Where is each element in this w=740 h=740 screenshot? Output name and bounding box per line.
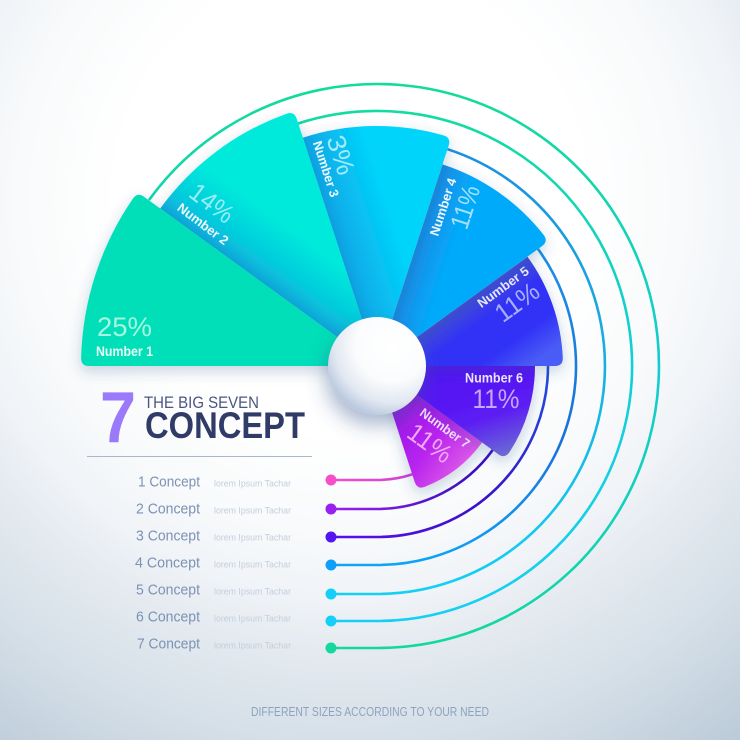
line 2: purple [331,450,493,509]
row 7: 7 Concept [137,636,200,652]
row 7: lorem Ipsum Tachar [214,640,291,652]
sector 5: 11% [489,276,545,328]
line 1: pink [331,474,412,480]
sector 6 [377,366,535,456]
sector 7: Number 7 [417,405,473,451]
sector 7 [377,366,482,488]
title line 1: THE BIG SEVEN [144,394,259,412]
row 4: lorem Ipsum Tachar [214,560,291,570]
row 7 [137,636,336,654]
row 1 [138,474,336,490]
row 4 [135,556,336,572]
sector 3: 3% [321,131,361,179]
row 3: 3 Concept [136,528,200,544]
sector 4: 11% [444,181,486,233]
sector 1: 25% [97,312,152,342]
sector 1 [81,195,377,366]
line 7: green [149,84,659,648]
title block [100,378,305,458]
row 5: 5 Concept [136,582,200,598]
sector 5 [377,257,563,366]
concentric connector lines [149,84,659,648]
line 5: light blue [331,149,605,594]
sector 3: Number 3 [310,139,342,199]
row 5 [136,582,336,600]
line 6: cyan [298,111,632,621]
numeral 7: 7 [100,378,136,458]
sector 2: 14% [184,177,240,229]
row 3: lorem Ipsum Tachar [214,532,291,544]
line 4: blue [331,249,576,565]
sector 4 [377,164,546,366]
row 4: 4 Concept [135,556,200,572]
sector 7: 11% [402,417,458,469]
title line 2: CONCEPT [145,405,305,446]
row 2: lorem Ipsum Tachar [214,506,291,516]
line 3: indigo [331,366,548,537]
sector 1: Number 1 [96,344,153,359]
row 1: 1 Concept [138,474,200,490]
fan chart [81,113,563,488]
sector 2 [160,113,377,366]
sector 3 [303,126,449,366]
legend rows [135,474,336,654]
sector 2: Number 2 [175,200,231,248]
row 6 [136,610,336,626]
row 6: lorem Ipsum Tachar [214,614,291,624]
centre sphere [328,317,426,415]
row 1: lorem Ipsum Tachar [214,478,291,490]
sector 4: Number 4 [427,175,460,238]
row 2 [136,502,336,518]
row 3 [136,528,336,544]
footer note: DIFFERENT SIZES ACCORDING TO YOUR NEED [251,705,489,719]
sector 5: Number 5 [474,263,532,311]
sector 6: 11% [472,384,520,414]
row 2: 2 Concept [136,502,200,518]
row 6: 6 Concept [136,610,200,626]
sector 6: Number 6 [465,370,523,386]
row 5: lorem Ipsum Tachar [214,586,291,598]
